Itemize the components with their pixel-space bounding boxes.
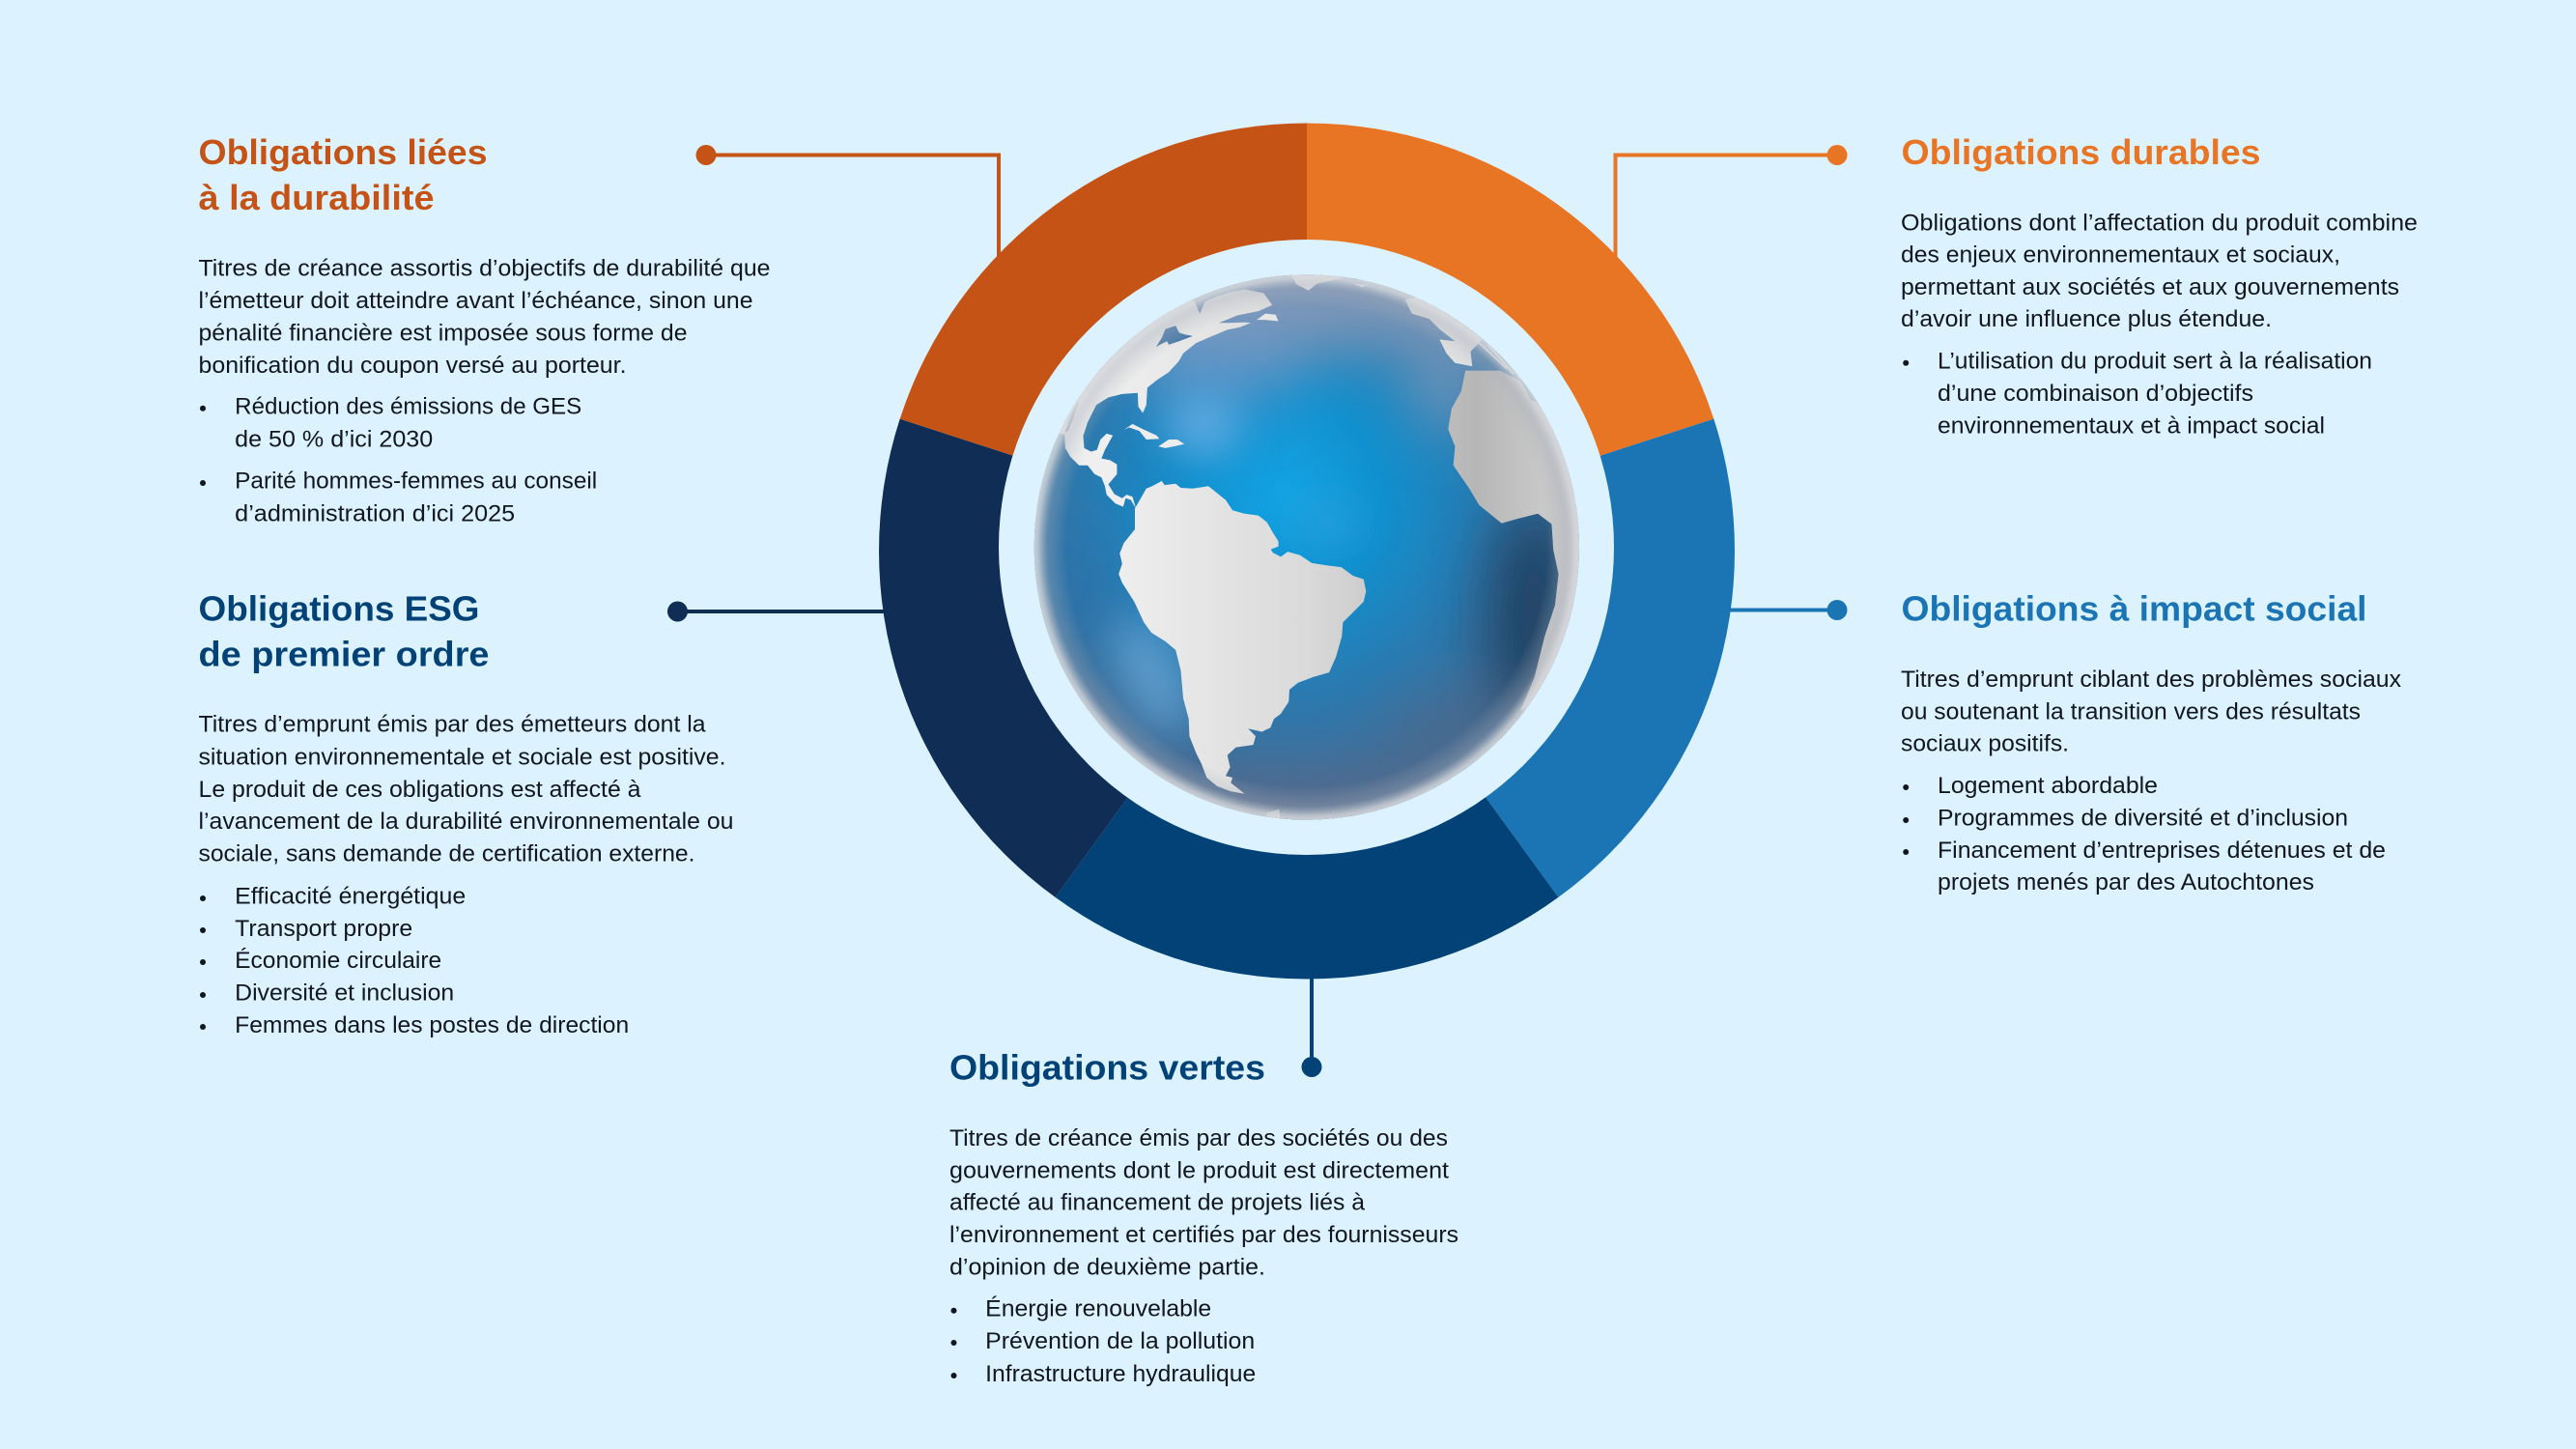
land: Baja inlet xyxy=(1064,402,1078,433)
description: pénalité financière est imposée sous forme de xyxy=(199,321,688,346)
connector: social impact bonds xyxy=(1719,600,1847,620)
bullet list: Programmes de diversité et d’inclusion xyxy=(1938,806,2348,831)
connector: sustainability-linked bonds xyxy=(695,145,999,280)
bullet list: Infrastructure hydraulique xyxy=(985,1361,1256,1387)
heading: Obligations à impact social xyxy=(1901,589,2366,629)
land: South America xyxy=(1118,481,1366,794)
description: l’avancement de la durabilité environnementale ou xyxy=(199,809,733,835)
ring segment: social impact bonds xyxy=(1307,419,1735,897)
bullet list: d’une combinaison d’objectifs xyxy=(1938,381,2253,407)
description xyxy=(199,256,771,379)
description: l’émetteur doit atteindre avant l’échéance, sinon une xyxy=(199,288,753,314)
description: gouvernements dont le produit est directement xyxy=(949,1157,1449,1183)
globe xyxy=(1033,274,1579,820)
connector: ESG bonds xyxy=(667,601,898,622)
bullet list xyxy=(1903,349,2372,439)
panel: social impact bonds xyxy=(1901,589,2401,895)
description: Titres d’emprunt émis par des émetteurs dont la xyxy=(199,712,706,738)
globe shading xyxy=(1033,274,1579,820)
land: Great Lakes xyxy=(1156,326,1193,347)
land: Africa xyxy=(1448,371,1579,711)
panel: ESG bonds xyxy=(199,588,733,1038)
land: Newfoundland xyxy=(1257,314,1279,321)
ring segment: ESG bonds xyxy=(879,419,1307,897)
bullet list: Femmes dans les postes de direction xyxy=(235,1012,629,1038)
heading: à la durabilité xyxy=(199,178,435,217)
heading: Obligations ESG xyxy=(199,588,479,628)
description: situation environnementale et sociale est positive. xyxy=(199,744,726,770)
bullet list: Parité hommes-femmes au conseil xyxy=(235,469,597,495)
description: sociaux positifs. xyxy=(1901,731,2069,757)
bullet list: Prévention de la pollution xyxy=(985,1328,1255,1354)
description xyxy=(1901,667,2401,757)
description xyxy=(199,712,733,867)
description: permettant aux sociétés et aux gouvernements xyxy=(1901,274,2399,300)
panel: sustainability-linked bonds xyxy=(199,132,771,526)
bullet list: Économie circulaire xyxy=(235,948,441,974)
description: l’environnement et certifiés par des fournisseurs xyxy=(949,1222,1458,1248)
land: Mediterranean coast lines xyxy=(1479,343,1520,379)
land: Iceland xyxy=(1353,284,1369,287)
description: d’avoir une influence plus étendue. xyxy=(1901,306,2272,332)
bullet list: projets menés par des Autochtones xyxy=(1938,869,2314,895)
ring segment: green bonds xyxy=(1056,551,1558,980)
bullet list: Énergie renouvelable xyxy=(985,1296,1211,1322)
ring segment: sustainability-linked bonds xyxy=(900,124,1307,551)
description: Titres d’emprunt ciblant des problèmes sociaux xyxy=(1901,667,2401,693)
description: Le produit de ces obligations est affecté à xyxy=(199,777,641,803)
description: Titres de créance émis par des sociétés ou des xyxy=(949,1125,1448,1151)
description: affecté au financement de projets liés à xyxy=(949,1190,1366,1216)
connector: sustainable bonds xyxy=(1615,145,1847,280)
heading: de premier ordre xyxy=(199,634,489,673)
panel: sustainable bonds xyxy=(1901,132,2418,439)
bullet list: L’utilisation du produit sert à la réalisation xyxy=(1938,349,2372,375)
globe limb highlight xyxy=(1034,274,1579,820)
donut ring xyxy=(879,124,1735,980)
connector: green bonds xyxy=(1302,966,1321,1077)
heading xyxy=(199,132,487,217)
heading: Obligations durables xyxy=(1901,132,2260,172)
heading: Obligations liées xyxy=(199,132,487,172)
bullet list: Diversité et inclusion xyxy=(235,980,454,1007)
description xyxy=(949,1125,1458,1280)
bullet list: Transport propre xyxy=(235,916,412,942)
globe ocean xyxy=(1034,274,1579,820)
bullet list: Logement abordable xyxy=(1938,773,2158,799)
bullet list: Financement d’entreprises détenues et de xyxy=(1938,838,2386,864)
bullet list: Réduction des émissions de GES xyxy=(235,394,581,419)
land: Hispaniola xyxy=(1158,440,1184,448)
bullet list xyxy=(200,884,629,1038)
description: Titres de créance assortis d’objectifs de durabilité que xyxy=(199,256,771,282)
description: des enjeux environnementaux et sociaux, xyxy=(1901,242,2340,269)
bullet list: Efficacité énergétique xyxy=(235,884,466,910)
description: Obligations dont l’affectation du produit combine xyxy=(1901,210,2418,236)
description: sociale, sans demande de certification externe. xyxy=(199,841,695,867)
ring segment: sustainable bonds xyxy=(1307,124,1713,551)
land: Europe xyxy=(1405,291,1489,366)
land: Antarctic sliver xyxy=(1266,810,1281,819)
land: Greenland xyxy=(1290,274,1343,291)
land: North and Central America xyxy=(1044,290,1272,508)
description: bonification du coupon versé au porteur. xyxy=(199,353,626,379)
bullet list xyxy=(950,1296,1256,1387)
panel: green bonds xyxy=(949,1048,1458,1387)
description: d’opinion de deuxième partie. xyxy=(949,1254,1265,1280)
bullet list: de 50 % d’ici 2030 xyxy=(235,427,433,452)
description: ou soutenant la transition vers des résultats xyxy=(1901,698,2361,724)
bullet list xyxy=(1903,773,2386,895)
bullet list: environnementaux et à impact social xyxy=(1938,412,2325,439)
ring inner hole xyxy=(999,240,1614,855)
description xyxy=(1901,210,2418,332)
heading xyxy=(199,588,489,673)
bullet list: d’administration d’ici 2025 xyxy=(235,500,515,526)
heading: Obligations vertes xyxy=(949,1048,1265,1088)
land: Cuba xyxy=(1124,424,1159,440)
bullet list xyxy=(200,394,597,526)
